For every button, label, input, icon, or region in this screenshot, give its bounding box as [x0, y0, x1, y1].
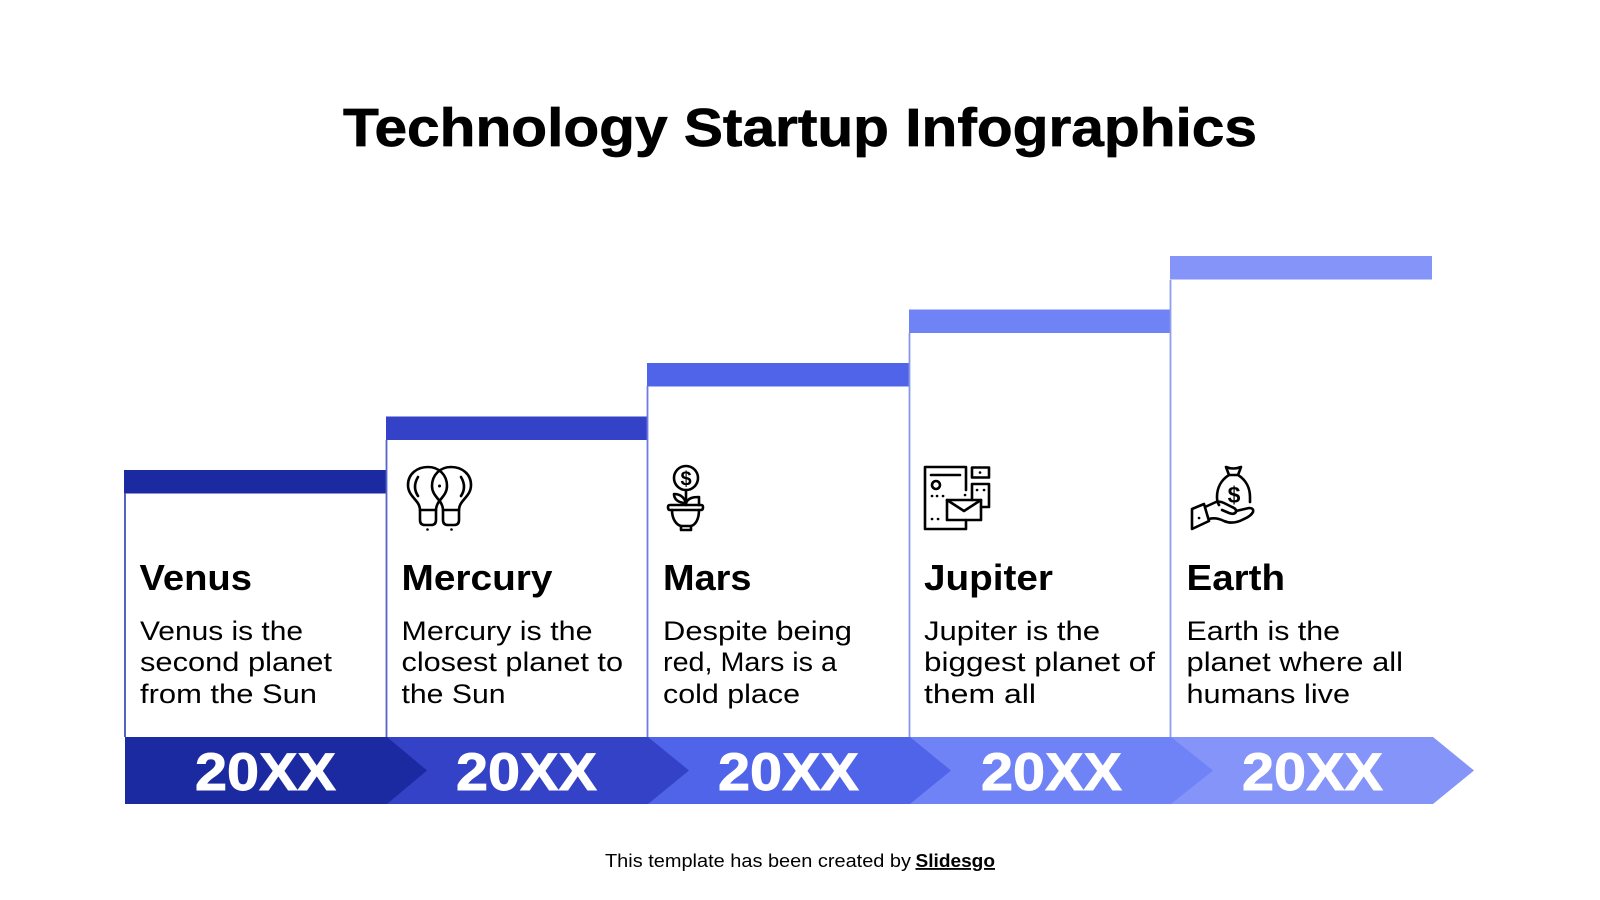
footer credit: This template has been created by [605, 850, 912, 871]
description: Jupiter: them all [924, 679, 1036, 709]
description: Mars: red, Mars is a [663, 647, 838, 677]
arrow: second [386, 737, 689, 804]
panel: Mars [647, 363, 909, 737]
arrow: fifth: 20XX [1242, 743, 1383, 802]
panel: Jupiter [909, 310, 1170, 737]
heading: Earth: Earth [1186, 557, 1285, 598]
icon: hand holding money bag [1192, 467, 1253, 529]
column top bar: Jupiter [909, 310, 1170, 333]
description: Earth: planet where all [1186, 647, 1403, 677]
arrow: second: 20XX [456, 743, 597, 802]
description: Earth [1186, 616, 1403, 709]
icon: documents and envelope [925, 467, 989, 529]
description: Jupiter: Jupiter is the [924, 616, 1100, 646]
heading: Mars: Mars [663, 557, 752, 598]
description: Mercury: closest planet to [402, 647, 623, 677]
arrow: first [125, 737, 427, 804]
title: Technology Startup Infographics [343, 98, 1257, 158]
heading: Venus: Venus [140, 557, 252, 598]
description: Venus: Venus is the [140, 616, 303, 646]
description: Mars: cold place [663, 679, 800, 709]
description: Mars [663, 616, 852, 709]
description: Jupiter [924, 616, 1156, 709]
arrow: fourth [909, 737, 1213, 804]
column top bar: Mercury [386, 416, 648, 440]
panel: Earth [1170, 256, 1432, 737]
description: Jupiter: biggest planet of [924, 647, 1156, 677]
column top bar: Mars [647, 363, 909, 386]
footer credit: Slidesgo [916, 850, 995, 871]
arrow: first: 20XX [195, 743, 336, 802]
panel: Mercury [386, 416, 648, 737]
description: Mars: Despite being [663, 616, 852, 646]
description: Venus: second planet [140, 647, 333, 677]
description: Mercury [402, 616, 623, 709]
icon: money plant [668, 466, 703, 530]
arrow: fifth [1170, 737, 1474, 804]
arrow: third [647, 737, 951, 804]
column top bar: Earth [1170, 256, 1432, 280]
icon: hand holding money bag: $ [1228, 482, 1241, 508]
description: Venus: from the Sun [140, 679, 317, 709]
arrow: fourth: 20XX [981, 743, 1122, 802]
heading: Mercury: Mercury [402, 557, 552, 598]
description: Mercury: Mercury is the [402, 616, 592, 646]
column top bar: Venus [124, 470, 386, 494]
icon: twin light bulbs [408, 467, 471, 531]
description: Venus [140, 616, 333, 709]
description: Mercury: the Sun [402, 679, 506, 709]
description: Earth: Earth is the [1186, 616, 1340, 646]
icon: money plant: $ [680, 468, 692, 490]
description: Earth: humans live [1186, 679, 1350, 709]
arrow: third: 20XX [718, 743, 859, 802]
timeline arrows [125, 737, 1474, 804]
heading: Jupiter: Jupiter [924, 557, 1053, 598]
panel: Venus [124, 470, 386, 737]
